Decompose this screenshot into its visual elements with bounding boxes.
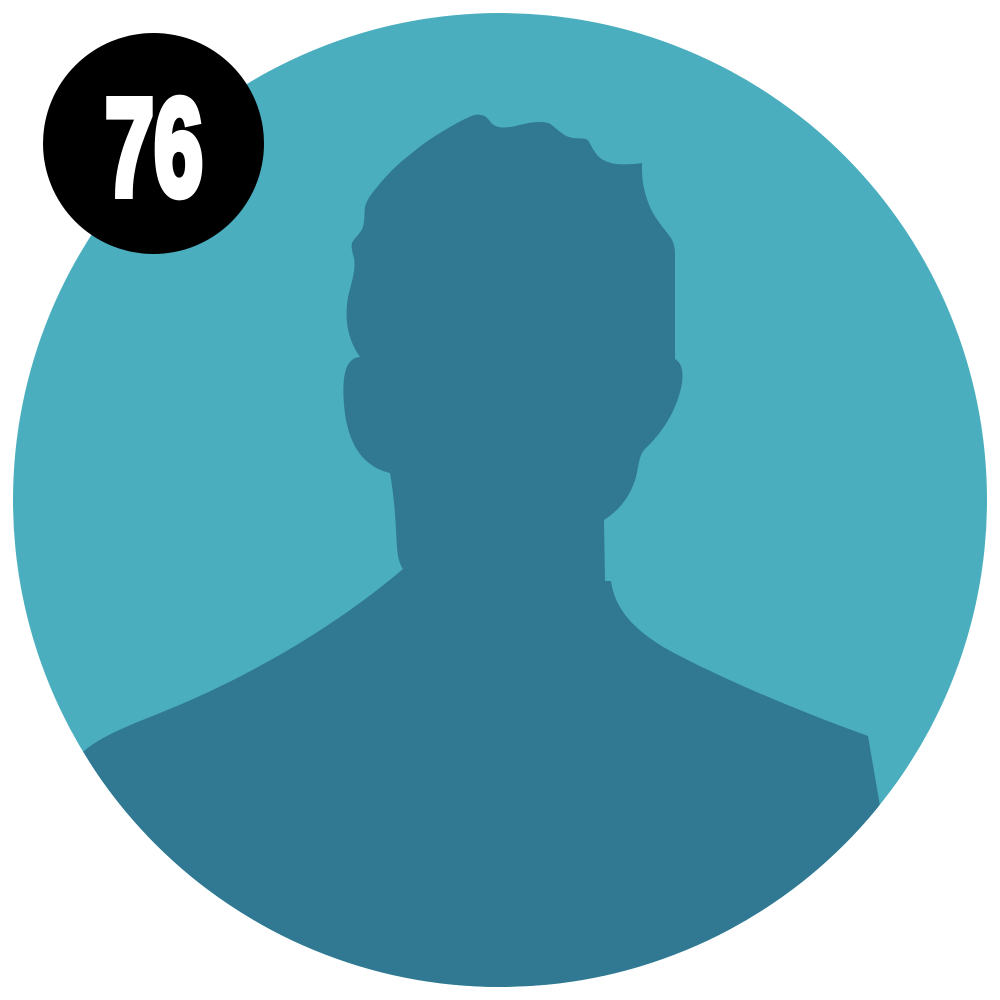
badge circle: [43, 33, 264, 254]
badge number: 76: [105, 71, 203, 225]
number badge: [43, 33, 264, 254]
icon: person silhouette: [60, 115, 880, 1000]
